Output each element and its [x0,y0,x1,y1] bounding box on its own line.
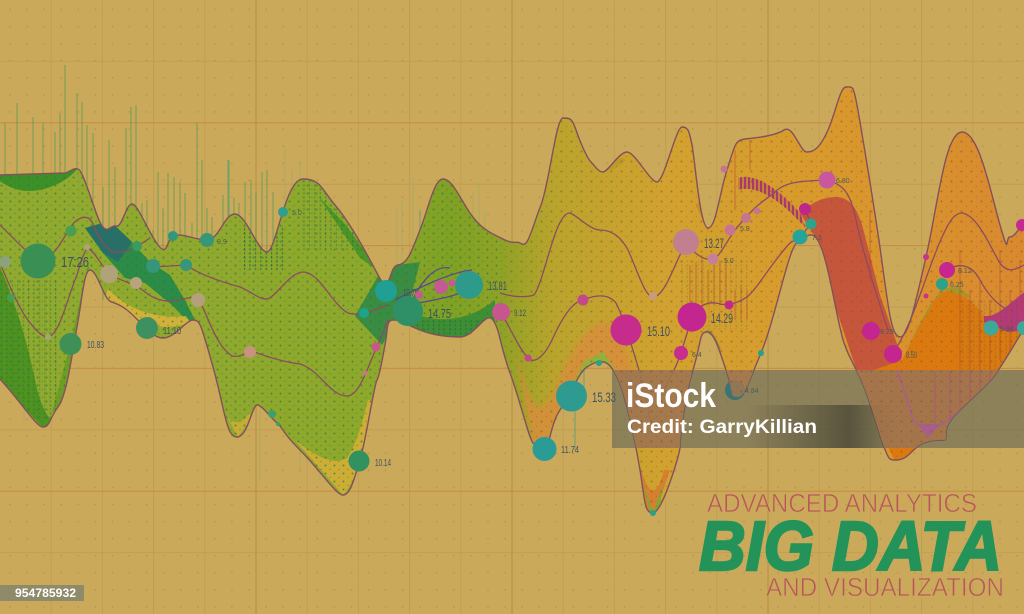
bubble 10.14: 10.14 [375,458,391,469]
bubble 10.75 [375,280,418,302]
iStock watermark band [612,370,1024,448]
ribbon stripes [0,140,1020,420]
bubble 10.14 [348,450,391,472]
bubble 13.81 [455,271,507,299]
bubble 14.75: 14.75 [428,306,451,321]
bubble 11.74 [532,437,579,461]
bubble 13.81: 13.81 [488,279,507,293]
data ribbon [0,80,1024,520]
bubble 13.27 [673,229,724,255]
small value labels: 9.9 [217,239,227,246]
ribbon dot texture right [505,80,1024,520]
small value labels: 6.4 [692,352,702,359]
bubble 15.10 [610,314,670,346]
small value labels: 6.80 [836,178,850,185]
bubble 8.50 [884,345,917,363]
small value labels: 5.0 [292,210,302,217]
trend lines [0,180,1024,420]
bubble 17:26: 17:26 [61,254,89,271]
title main: BIG DATA [699,507,1002,585]
ribbon dot texture left [0,160,505,500]
small value labels: 9.25 [880,329,894,336]
bubble 15.33: 15.33 [592,389,616,405]
bubble 15.33 [556,380,616,412]
ribbon tint through watermark [612,370,1024,448]
vertical data spikes [5,65,595,490]
bubble 17:26 [20,244,89,278]
bubble 14.75 [393,296,451,326]
title [699,488,1004,602]
bubble 10.83 [60,333,104,355]
small value labels: 5.94 [1000,326,1014,333]
ribbon colour bands [0,158,1024,514]
bubble 11.74: 11.74 [561,445,579,456]
small value labels: 8.12 [958,268,972,275]
watermark shading [745,405,890,448]
title line 1: ADVANCED ANALYTICS [707,488,977,518]
bubble 8.50: 8.50 [906,350,917,360]
small value labels: 6.25 [950,282,964,289]
small value labels [217,178,1014,395]
bubble 11.10: 11.10 [163,326,181,337]
bubble 9.12 [492,303,526,321]
bubble 13.27: 13.27 [704,235,724,251]
watermark logo: iStock [626,377,716,415]
ribbon base [0,87,1024,513]
bubble 14.29 [678,302,733,332]
bubble 14.29: 14.29 [711,310,733,326]
bubble 10.75: 10.75 [403,288,418,299]
watermark credit: Credit: GarryKillian [627,417,817,438]
small value labels: 4.84 [745,388,759,395]
image id tag [0,585,84,601]
small nodes [0,166,1024,516]
title line 3: AND VISUALIZATION [766,572,1004,602]
bubble 15.10: 15.10 [647,323,670,339]
small value labels: 5.8 [740,226,750,233]
data bubbles with labels [0,166,1024,516]
small value labels: 7.3 [812,235,822,242]
bubble 11.10 [136,317,181,339]
image id tag: 954785932 [15,588,76,600]
ribbon outline [0,87,1024,513]
small value labels: 5.0 [724,258,734,265]
bubble 9.12: 9.12 [514,308,526,318]
bubble 10.83: 10.83 [87,340,104,351]
